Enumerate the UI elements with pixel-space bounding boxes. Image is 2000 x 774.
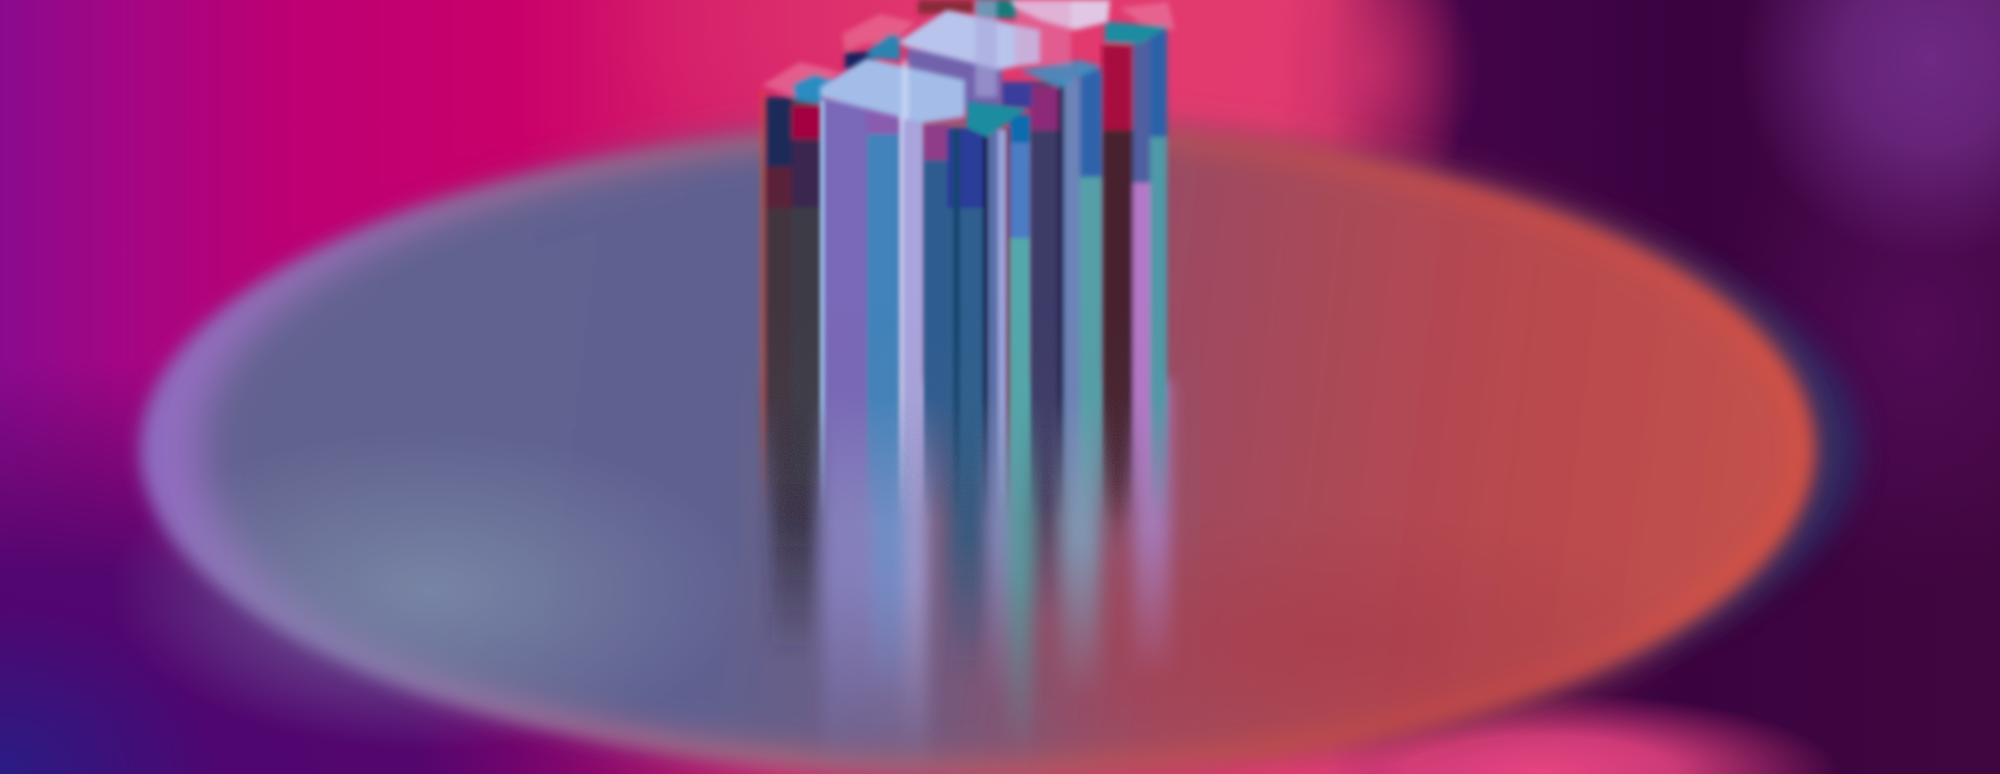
surface grain bbox=[756, 351, 1200, 602]
column group: rear tall red bbox=[1102, 2, 1175, 534]
column group: middle bbox=[1000, 60, 1102, 533]
reflections of the columns bbox=[772, 380, 1170, 774]
disc tint: lower left slate bbox=[134, 468, 677, 738]
column group: back left bbox=[760, 62, 840, 530]
glass columns bbox=[760, 0, 1175, 538]
highlight strips bbox=[902, 0, 1071, 120]
disc chromatic fringe bbox=[140, 126, 1860, 774]
disc surface bbox=[110, 124, 1806, 772]
top: centre column bbox=[898, 10, 1040, 70]
top: rear right column bbox=[1010, 0, 1110, 30]
glass column tops bbox=[820, 0, 1110, 123]
column group: front right blue bbox=[923, 102, 1030, 538]
column group: rear centre bbox=[842, 0, 1017, 108]
disc tint: lower right red bbox=[1171, 606, 1633, 706]
top: front column bbox=[820, 58, 965, 123]
column group: front lavender bbox=[820, 98, 923, 538]
